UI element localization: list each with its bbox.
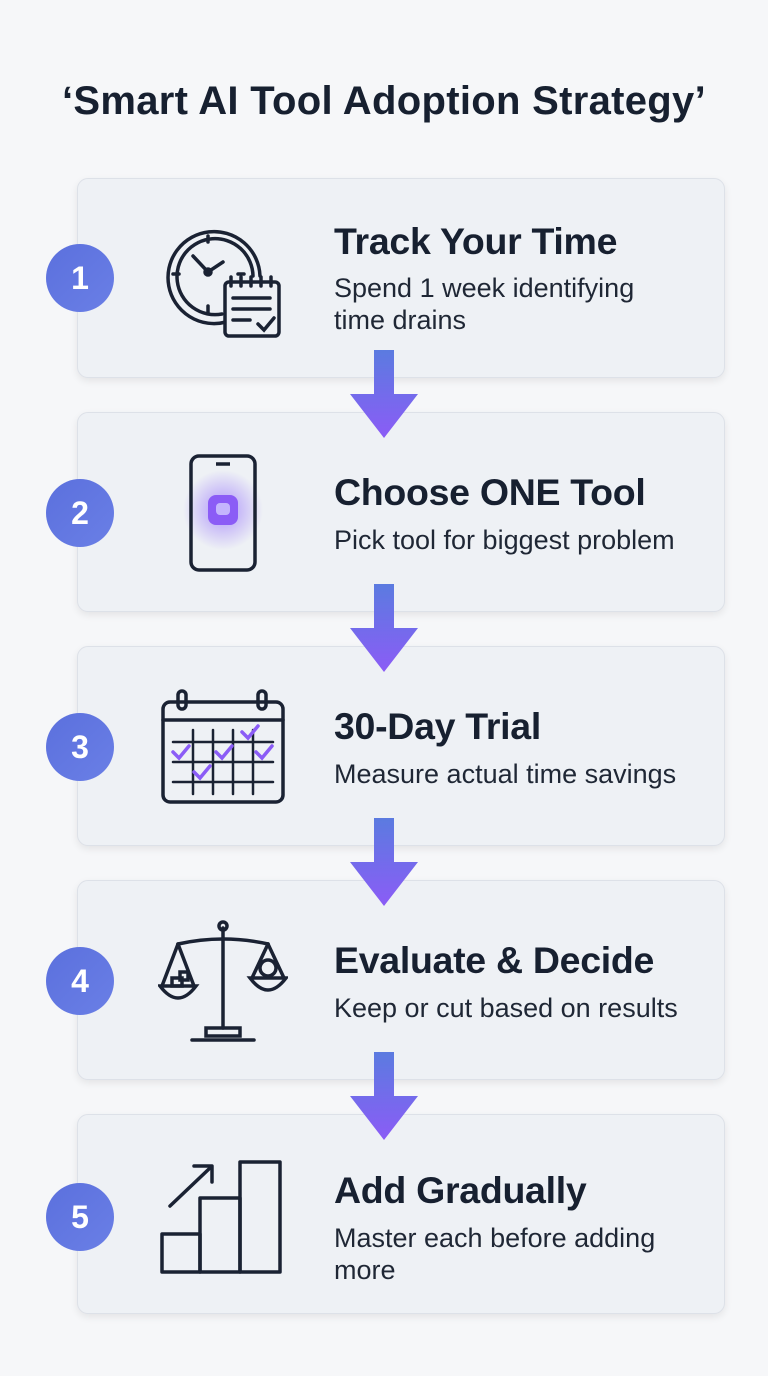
icon: balance scale <box>158 920 288 1042</box>
heading: Choose ONE Tool <box>334 471 645 513</box>
number badge 1 <box>46 244 114 312</box>
number badge 5 <box>46 1183 114 1251</box>
panel: step 2 <box>77 412 725 612</box>
panel: step 4 <box>77 880 725 1080</box>
heading: Track Your Time <box>334 220 617 262</box>
number badge 5: 5 <box>71 1199 89 1235</box>
number badge 4 <box>46 947 114 1015</box>
number badge 3: 3 <box>71 729 89 765</box>
number badge 3 <box>46 713 114 781</box>
number badge 2 <box>46 479 114 547</box>
text: Measure actual time savings <box>334 759 676 789</box>
arrow 4 <box>350 1052 418 1140</box>
arrow 2 <box>350 584 418 672</box>
heading: 30-Day Trial <box>334 705 541 747</box>
arrow 1 <box>350 350 418 438</box>
text: Keep or cut based on results <box>334 993 678 1023</box>
number badge 1: 1 <box>71 260 89 296</box>
icon: clock with calendar <box>166 230 281 338</box>
arrow 3 <box>350 818 418 906</box>
number badge 2: 2 <box>71 495 89 531</box>
title: ‘Smart AI Tool Adoption Strategy’ <box>62 79 706 123</box>
icon: phone with app <box>186 454 260 572</box>
text: Pick tool for biggest problem <box>334 525 675 555</box>
heading: Add Gradually <box>334 1169 586 1211</box>
text: Master each before adding more <box>334 1223 655 1285</box>
heading: Evaluate & Decide <box>334 939 654 981</box>
panel: step 1 <box>77 178 725 378</box>
text: Spend 1 week identifying time drains <box>334 273 634 335</box>
icon: growth bars <box>160 1160 282 1274</box>
panel: step 5 <box>77 1114 725 1314</box>
number badge 4: 4 <box>71 963 89 999</box>
panel: step 3 <box>77 646 725 846</box>
icon: calendar with checks <box>161 689 285 804</box>
